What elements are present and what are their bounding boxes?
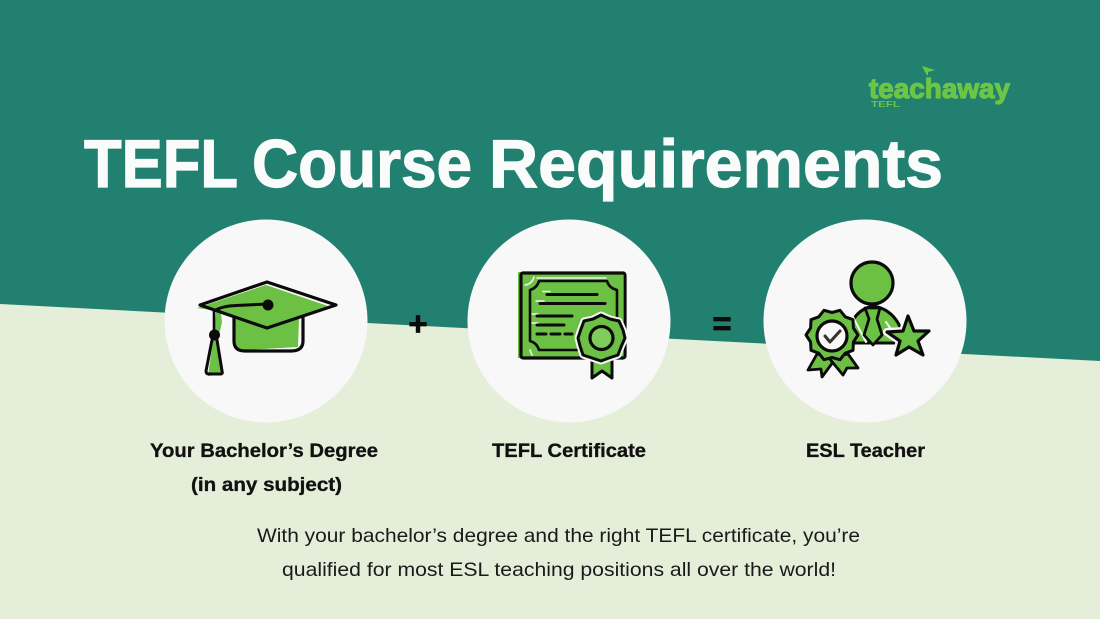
icon: graduation cap — [197, 282, 336, 376]
background: teal diagonal upper area — [0, 0, 1100, 361]
plus sign: + — [408, 305, 428, 342]
title: Course — [252, 126, 472, 202]
description text: qualified for most ESL teaching positions all over the world! — [282, 559, 836, 581]
label: bachelor's degree — [150, 441, 378, 496]
panel: TEFL certificate circle — [468, 220, 670, 422]
label: TEFL certificate: TEFL Certificate — [492, 441, 646, 462]
panel: ESL teacher circle — [764, 220, 966, 422]
description text: With your bachelor’s degree and the right TEFL certificate, you’re — [257, 525, 860, 547]
logo: teachaway TEFL: TEFL — [871, 99, 900, 109]
label: ESL teacher: ESL Teacher — [806, 441, 926, 462]
title: TEFL — [84, 126, 238, 202]
title — [84, 126, 943, 202]
logo: teachaway TEFL: teachaway — [869, 73, 1010, 104]
icon: teacher with award and star — [806, 260, 929, 377]
title: Requirements — [489, 126, 943, 202]
equals sign: = — [712, 305, 732, 342]
label: bachelor's degree: (in any subject) — [191, 475, 342, 496]
icon: certificate — [518, 272, 625, 378]
label: bachelor's degree: Your Bachelor’s Degree — [150, 441, 378, 462]
panel: bachelor's degree circle — [164, 220, 368, 422]
description text — [257, 525, 860, 581]
